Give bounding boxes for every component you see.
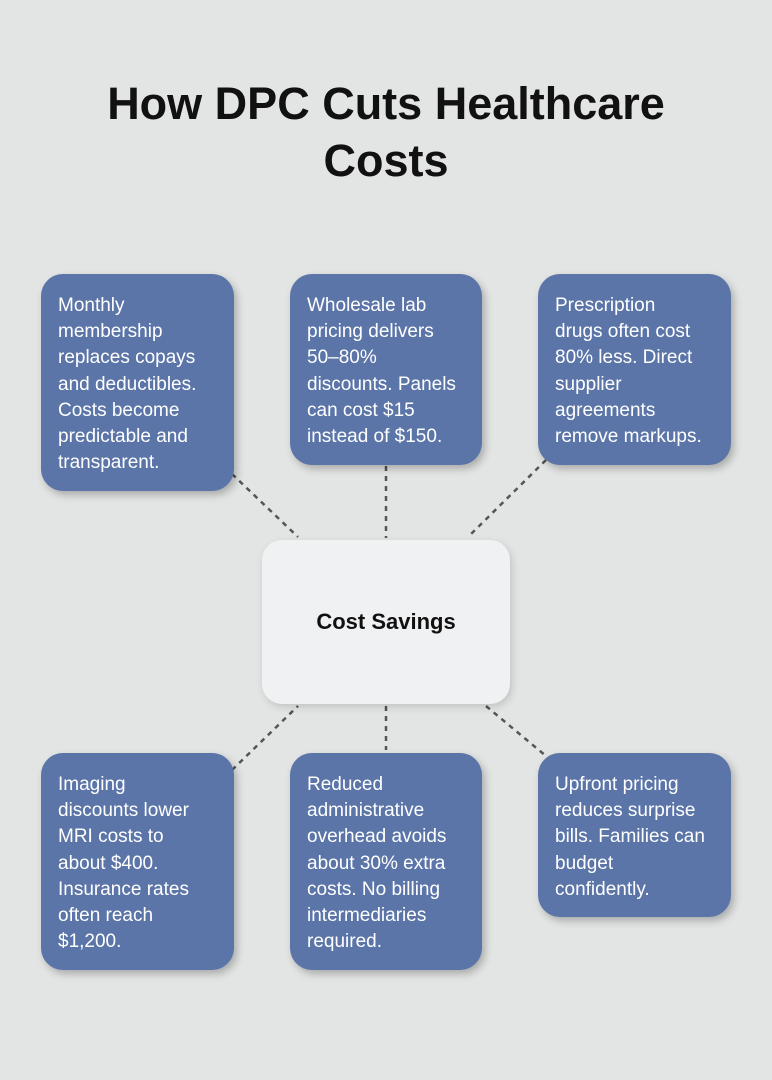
box: admin: intermediaries (307, 905, 426, 926)
box: admin: administrative (307, 800, 424, 821)
box: lab pricing: instead of $150. (307, 426, 442, 447)
box: imaging (41, 753, 234, 970)
box: prescriptions: agreements (555, 400, 655, 421)
box: lab pricing: Wholesale lab (307, 295, 426, 316)
box: prescriptions: 80% less. Direct (555, 347, 692, 368)
box: admin: Reduced (307, 774, 383, 795)
box: lab pricing: pricing delivers (307, 321, 434, 342)
box: imaging: MRI costs to (58, 826, 164, 847)
box: upfront pricing: reduces surprise (555, 800, 695, 821)
box: membership: and deductibles. (58, 374, 196, 395)
box: upfront pricing: confidently. (555, 879, 650, 900)
box: membership: replaces copays (58, 347, 195, 368)
box: upfront pricing: bills. Families can (555, 826, 705, 847)
box: upfront pricing: budget (555, 853, 613, 874)
box: lab pricing: can cost $15 (307, 400, 415, 421)
center: cost savings: Cost Savings (316, 609, 456, 634)
box: membership: transparent. (58, 452, 159, 473)
box: lab pricing (290, 274, 482, 465)
box: lab pricing: discounts. Panels (307, 374, 456, 395)
title: Costs (323, 135, 449, 186)
box: admin (290, 753, 482, 970)
box: prescriptions: drugs often cost (555, 321, 690, 342)
box: admin: about 30% extra (307, 853, 445, 874)
box: admin: required. (307, 931, 382, 952)
box: imaging: Insurance rates (58, 879, 189, 900)
title: How DPC Cuts Healthcare (107, 78, 665, 129)
box: upfront pricing (538, 753, 731, 917)
box: upfront pricing: Upfront pricing (555, 774, 679, 795)
box: membership: predictable and (58, 426, 188, 447)
box: imaging: $1,200. (58, 931, 121, 952)
box: membership: Monthly (58, 295, 125, 316)
title (107, 78, 665, 186)
box: imaging: discounts lower (58, 800, 189, 821)
box: membership: Costs become (58, 400, 179, 421)
box: prescriptions (538, 274, 731, 465)
box: prescriptions: remove markups. (555, 426, 702, 447)
box: imaging: Imaging (58, 774, 126, 795)
box: imaging: often reach (58, 905, 153, 926)
box: lab pricing: 50–80% (307, 347, 377, 368)
box: imaging: about $400. (58, 853, 158, 874)
box: admin: costs. No billing (307, 879, 440, 900)
box: membership (41, 274, 234, 491)
box: prescriptions: supplier (555, 374, 622, 395)
box: membership: membership (58, 321, 163, 342)
box: admin: overhead avoids (307, 826, 446, 847)
box: prescriptions: Prescription (555, 295, 655, 316)
center: cost savings (262, 540, 510, 704)
